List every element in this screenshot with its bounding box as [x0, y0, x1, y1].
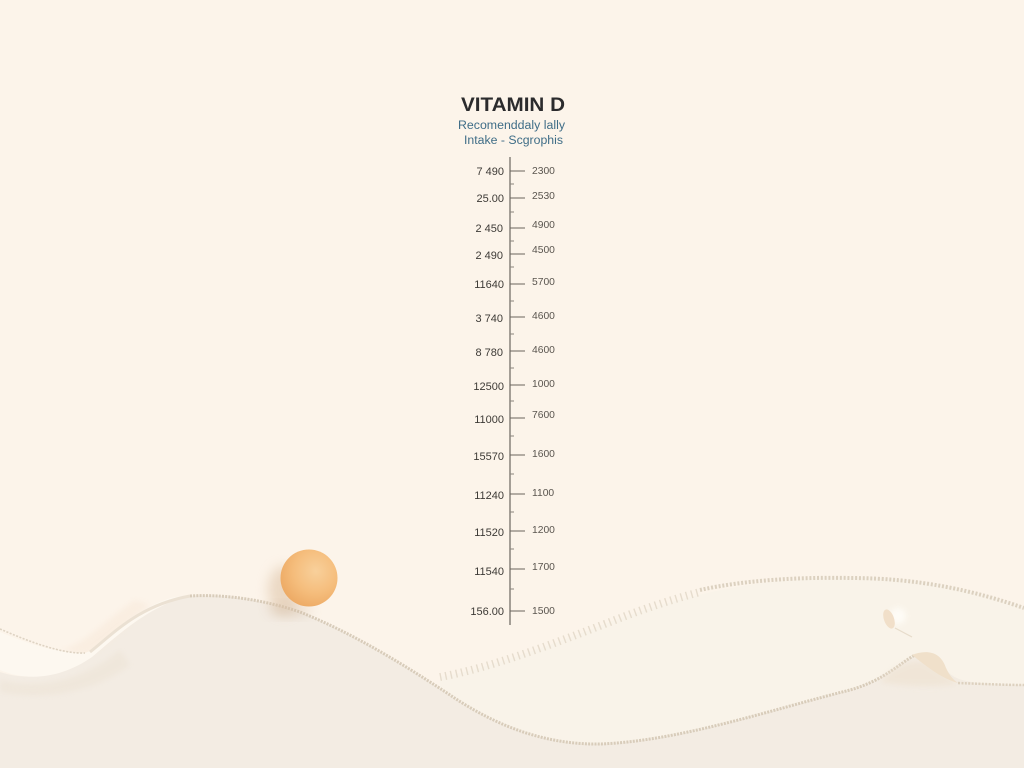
- right scale labels: 4600: [532, 345, 555, 356]
- left scale labels: 7 490: [476, 166, 504, 178]
- left scale labels: 12500: [473, 381, 504, 393]
- right scale labels: 1500: [532, 606, 555, 617]
- right scale labels: 4900: [532, 220, 555, 231]
- subtitle: Intake - Scgrophis: [464, 135, 563, 147]
- left scale labels: 3 740: [475, 313, 503, 325]
- scale axis: [509, 157, 511, 625]
- right scale labels: 2530: [532, 191, 555, 202]
- ribbon fold, right: [912, 652, 958, 683]
- title block: [458, 95, 565, 147]
- subtitle: [458, 120, 565, 147]
- left scale labels: 11640: [474, 279, 504, 291]
- right scale labels: 1000: [532, 379, 555, 390]
- left scale labels: 11240: [474, 490, 504, 502]
- heading: Vitamin D: VITAMIN D: [461, 95, 565, 116]
- left scale labels: 11540: [474, 566, 504, 578]
- left scale labels: 2 450: [475, 223, 503, 235]
- narrow stitches, crest section: [700, 578, 1024, 608]
- stitched edge, lower curve: [190, 596, 915, 744]
- wave: right paper layer: [440, 577, 1024, 768]
- left scale labels: 156.00: [470, 606, 504, 618]
- right scale labels: 4600: [532, 311, 555, 322]
- left scale labels: 11000: [474, 414, 504, 426]
- peach shadow above left ribbon: [60, 600, 150, 655]
- right scale labels: 1600: [532, 449, 555, 460]
- right scale labels: 2300: [532, 166, 555, 177]
- wide stitches, rising section: [440, 592, 700, 677]
- wave: lower paper layer: [0, 596, 1024, 768]
- left scale labels: [470, 166, 504, 618]
- subtitle: Recomenddaly lally: [458, 120, 565, 132]
- right scale labels: 1100: [532, 488, 554, 499]
- right scale labels: [532, 166, 555, 617]
- small cream bead: [881, 608, 912, 637]
- left scale labels: 11520: [474, 527, 504, 539]
- right scale labels: 7600: [532, 410, 555, 421]
- scale chart: [470, 157, 555, 625]
- fold shadow, left: [0, 650, 130, 695]
- left scale labels: 2 490: [475, 250, 503, 262]
- ribbon fold, left: [0, 596, 190, 677]
- major ticks: [510, 171, 525, 611]
- right scale labels: 5700: [532, 277, 555, 288]
- right scale labels: 1200: [532, 525, 555, 536]
- left scale labels: 25.00: [476, 193, 504, 205]
- left scale labels: 15570: [473, 451, 504, 463]
- right scale labels: 4500: [532, 245, 555, 256]
- fold shadow, right: [880, 661, 958, 686]
- left scale labels: 8 780: [475, 347, 503, 359]
- orange vitamin sphere: [268, 550, 338, 616]
- right scale labels: 1700: [532, 562, 555, 573]
- minor ticks: [510, 184, 514, 589]
